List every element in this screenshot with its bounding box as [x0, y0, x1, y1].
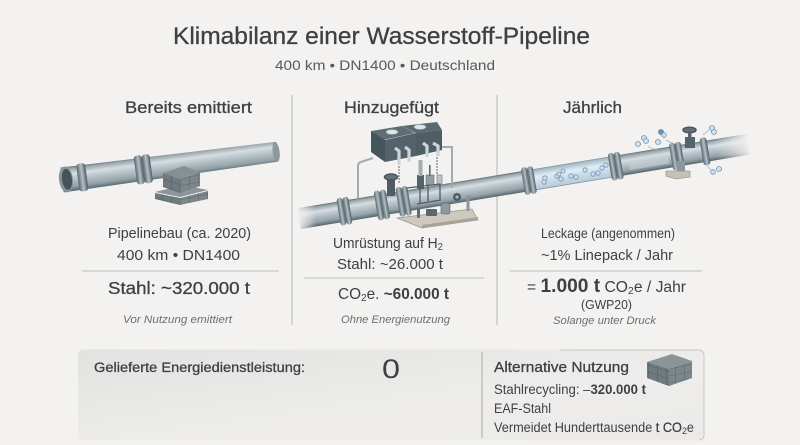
note: solange unter druck: Solange unter Druck: [553, 315, 657, 327]
illustration: continuous pipeline: [296, 122, 753, 234]
text: linepack: ~1% Linepack / Jahr: [541, 248, 673, 264]
valve and instrument stems: [384, 160, 442, 204]
pipe body: [297, 129, 753, 233]
panel: jährlich: [510, 98, 702, 327]
text: vermeidet: Vermeidet Hunderttausende t CO: [494, 420, 684, 435]
text: stahl zusatz: Stahl: ~26.000 t: [337, 257, 443, 273]
value: co2e pro jahr: 2: [628, 285, 634, 297]
panel: bereits emittiert: [57, 98, 282, 326]
text: vermeidet: 2: [682, 426, 687, 437]
icon: pipe section with steel stack: [57, 137, 282, 205]
text: länge und durchmesser: 400 km • DN1400: [117, 248, 240, 264]
text: pipelinebau: Pipelinebau (ca. 2020): [108, 226, 251, 242]
value: stahl: Stahl: ~320.000 t: [108, 278, 250, 298]
text: gwp20: (GWP20): [581, 297, 632, 312]
note: ohne energienutzung: Ohne Energienutzung: [341, 314, 451, 326]
value: co2e: e.: [367, 286, 384, 303]
value: co2e: 2: [361, 292, 367, 304]
value: co2e: ~60.000 t: [384, 286, 450, 303]
left end fade: [296, 198, 316, 234]
text: umrüstung: 2: [438, 242, 443, 253]
note: vor nutzung: Vor Nutzung emittiert: [123, 314, 233, 326]
valve and support on right pipe: [666, 127, 696, 179]
panel: hinzugefügt: [304, 98, 484, 326]
text: stahlrecycling: Stahlrecycling: –320.000 t: [494, 382, 646, 397]
title: Klimabilanz einer Wasserstoff-Pipeline: [173, 23, 590, 50]
text: umrüstung: Umrüstung auf H: [333, 236, 443, 252]
value: co2e: CO: [338, 286, 362, 303]
hydrogen molecules: [542, 126, 722, 184]
heading: hinzugefügt: Hinzugefügt: [344, 98, 439, 117]
subtitle: 400 km • DN1400 • Deutschland: [275, 58, 495, 73]
plate with instruments: [397, 193, 478, 228]
text: vermeidet: e: [687, 420, 694, 435]
heading: jährlich: Jährlich: [563, 98, 622, 117]
value: null: 0: [382, 354, 400, 384]
heading: bereits emittiert: Bereits emittiert: [125, 98, 252, 117]
label: gelieferte energiedienstleistung: Gelieferte Energiedienstleistung:: [94, 360, 305, 375]
panel: energiedienstleistung und alternative: [78, 350, 704, 440]
heading: alternative nutzung: Alternative Nutzung: [494, 360, 629, 376]
control boxes: [358, 122, 452, 198]
value: co2e pro jahr: = 1.000 t CO: [527, 276, 628, 297]
value: co2e pro jahr: e / Jahr: [634, 279, 686, 296]
text: eaf-stahl: EAF-Stahl: [494, 401, 551, 416]
text: leckage: Leckage (angenommen): [541, 225, 675, 241]
icon: steel stack: [647, 354, 692, 386]
